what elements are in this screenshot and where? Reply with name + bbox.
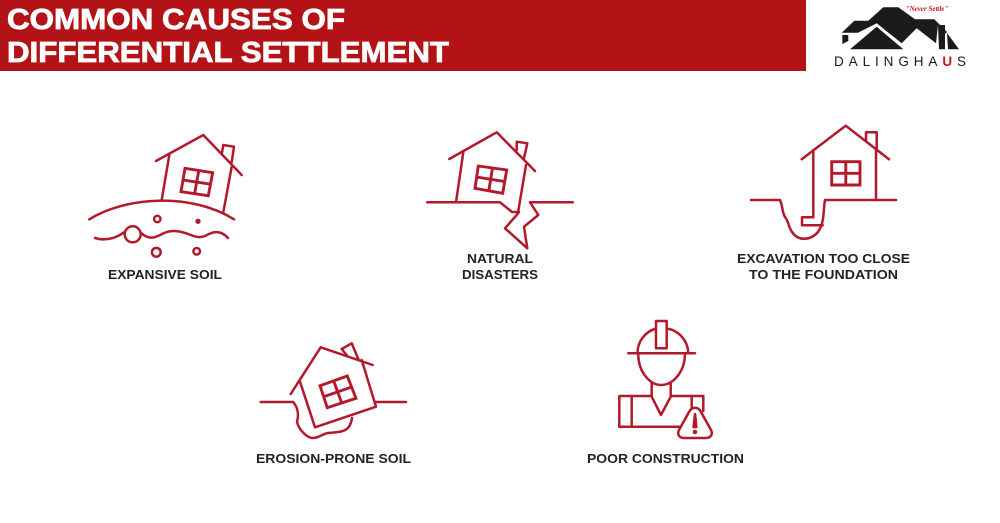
label: EROSION-PRONE SOIL	[256, 451, 411, 466]
logo tagline: "Never Settle"	[906, 5, 948, 13]
label: TO THE FOUNDATION	[749, 267, 898, 282]
label: NATURAL	[467, 251, 533, 266]
label: DISASTERS	[462, 267, 538, 282]
header banner	[0, 0, 806, 71]
panel: erosion-prone soil	[256, 343, 411, 466]
panel: excavation too close	[737, 126, 910, 282]
label: POOR CONSTRUCTION	[587, 451, 744, 466]
title: COMMON CAUSES OF	[7, 4, 345, 36]
panel: natural disasters	[427, 132, 573, 282]
label: EXPANSIVE SOIL	[108, 267, 222, 282]
panel: poor construction	[587, 321, 744, 466]
icon: worker with warning sign	[619, 321, 712, 438]
label	[462, 251, 538, 282]
panel: expansive soil	[89, 135, 242, 282]
icon: house beside excavated trench	[751, 126, 896, 239]
icon: house over ground crack	[427, 132, 573, 248]
logo wordmark: DALINGHA U S	[834, 54, 966, 69]
icon: tilted house on swelling ground	[89, 135, 242, 257]
logo roofs	[842, 7, 959, 49]
title: DIFFERENTIAL SETTLEMENT	[7, 37, 450, 69]
label: EXCAVATION TOO CLOSE	[737, 251, 910, 266]
label	[737, 251, 910, 282]
icon: house sinking into eroded soil	[261, 343, 406, 438]
title	[7, 4, 450, 69]
logo: Dalinghaus	[834, 5, 966, 69]
